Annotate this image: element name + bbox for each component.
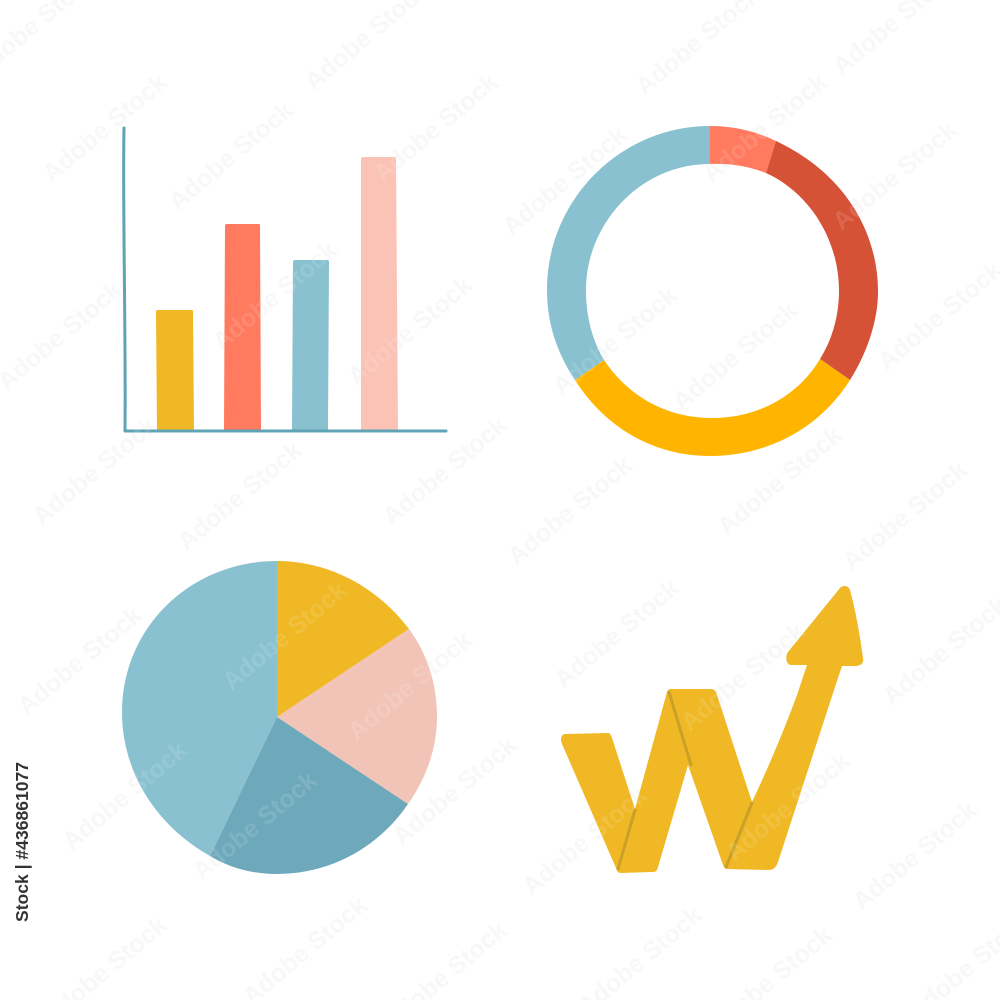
watermark pattern: background layer: Adobe Stock	[547, 281, 682, 401]
watermark pattern: background layer: Adobe Stock	[57, 736, 192, 856]
watermark pattern: background layer: Adobe Stock	[37, 68, 172, 188]
bar: pink	[361, 157, 398, 430]
donut segment: red	[766, 141, 878, 380]
watermark pattern: background layer: Adobe Stock	[217, 576, 352, 696]
arrow body	[561, 586, 863, 873]
donut segment: blue	[547, 126, 710, 380]
pie slice: pink	[277, 629, 437, 804]
donut chart	[547, 126, 878, 456]
chart axes	[124, 128, 446, 431]
watermark pattern: overlay on charts: Adobe Stock	[27, 411, 162, 531]
watermark pattern: overlay on charts: Adobe Stock	[217, 576, 352, 696]
stock image identifier: Stock | #436861077	[12, 762, 32, 922]
bar: yellow	[156, 310, 194, 430]
watermark pattern: overlay on charts: Adobe Stock	[667, 296, 802, 416]
watermark pattern: background layer: Adobe Stock	[12, 601, 147, 721]
watermark pattern: background layer: Adobe Stock	[720, 747, 855, 867]
watermark pattern: overlay on charts: Adobe Stock	[342, 271, 477, 391]
watermark pattern: background layer: Adobe Stock	[549, 574, 684, 694]
watermark pattern: overlay on charts: Adobe Stock	[517, 781, 652, 901]
bar chart	[124, 128, 446, 431]
watermark pattern: background layer: Adobe Stock	[27, 411, 162, 531]
watermark pattern: overlay on charts: Adobe Stock	[549, 574, 684, 694]
pie slice: light blue	[122, 561, 277, 856]
watermark pattern: background layer: Adobe Stock	[712, 421, 847, 541]
pie chart	[122, 561, 437, 874]
watermark pattern: background layer: Adobe Stock	[163, 96, 298, 216]
watermark pattern: overlay on charts: Adobe Stock	[163, 96, 298, 216]
watermark pattern: background layer: Adobe Stock	[368, 68, 503, 188]
watermark pattern: overlay on charts: Adobe Stock	[720, 747, 855, 867]
bar: blue	[292, 260, 329, 430]
pie slice: yellow	[277, 561, 409, 717]
bar: coral	[224, 224, 261, 430]
watermark pattern: background layer: Adobe Stock	[377, 411, 512, 531]
watermark pattern: overlay on charts: Adobe Stock	[547, 281, 682, 401]
watermark pattern: background layer: Adobe Stock	[697, 68, 832, 188]
watermark pattern: overlay on charts: Adobe Stock	[697, 68, 832, 188]
arrow fold lines	[618, 692, 752, 869]
watermark pattern: background layer: Adobe Stock	[675, 617, 810, 737]
donut segment: amber	[575, 359, 850, 456]
watermark pattern: background layer: Adobe Stock	[172, 436, 307, 556]
watermark pattern: background layer: Adobe Stock	[497, 121, 632, 241]
watermark pattern: background layer: Adobe Stock	[187, 766, 322, 886]
donut segment: coral	[710, 126, 776, 173]
pie slice: dark blue	[210, 717, 408, 874]
watermark pattern: overlay on charts: Adobe Stock	[675, 617, 810, 737]
watermark pattern: overlay on charts: Adobe Stock	[712, 421, 847, 541]
watermark pattern: background layer: Adobe Stock	[502, 451, 637, 571]
icon: zigzag growth arrow	[561, 586, 863, 873]
watermark pattern: background layer: Adobe Stock	[342, 271, 477, 391]
watermark pattern: background layer: Adobe Stock	[387, 731, 522, 851]
watermark pattern: background layer: Adobe Stock	[342, 626, 477, 746]
watermark pattern: background layer: Adobe Stock	[847, 796, 982, 916]
watermark pattern: overlay on charts: Adobe Stock	[377, 411, 512, 531]
watermark pattern: overlay on charts: Adobe Stock	[57, 736, 192, 856]
watermark pattern: overlay on charts: Adobe Stock	[827, 116, 962, 236]
watermark pattern: overlay on charts: Adobe Stock	[497, 121, 632, 241]
watermark pattern: background layer: Adobe Stock	[667, 296, 802, 416]
watermark pattern: overlay on charts: Adobe Stock	[12, 601, 147, 721]
watermark pattern: background layer: Adobe Stock	[517, 781, 652, 901]
watermark pattern: background layer: Adobe Stock	[827, 116, 962, 236]
watermark pattern: overlay on charts: Adobe Stock	[207, 236, 342, 356]
watermark pattern: overlay on charts: Adobe Stock	[187, 766, 322, 886]
watermark pattern: background layer: Adobe Stock	[207, 236, 342, 356]
watermark pattern: background layer: Adobe Stock	[837, 456, 972, 576]
watermark pattern: overlay on charts: Adobe Stock	[368, 68, 503, 188]
watermark pattern: overlay on charts: Adobe Stock	[342, 626, 477, 746]
watermark pattern: overlay on charts: Adobe Stock	[37, 68, 172, 188]
